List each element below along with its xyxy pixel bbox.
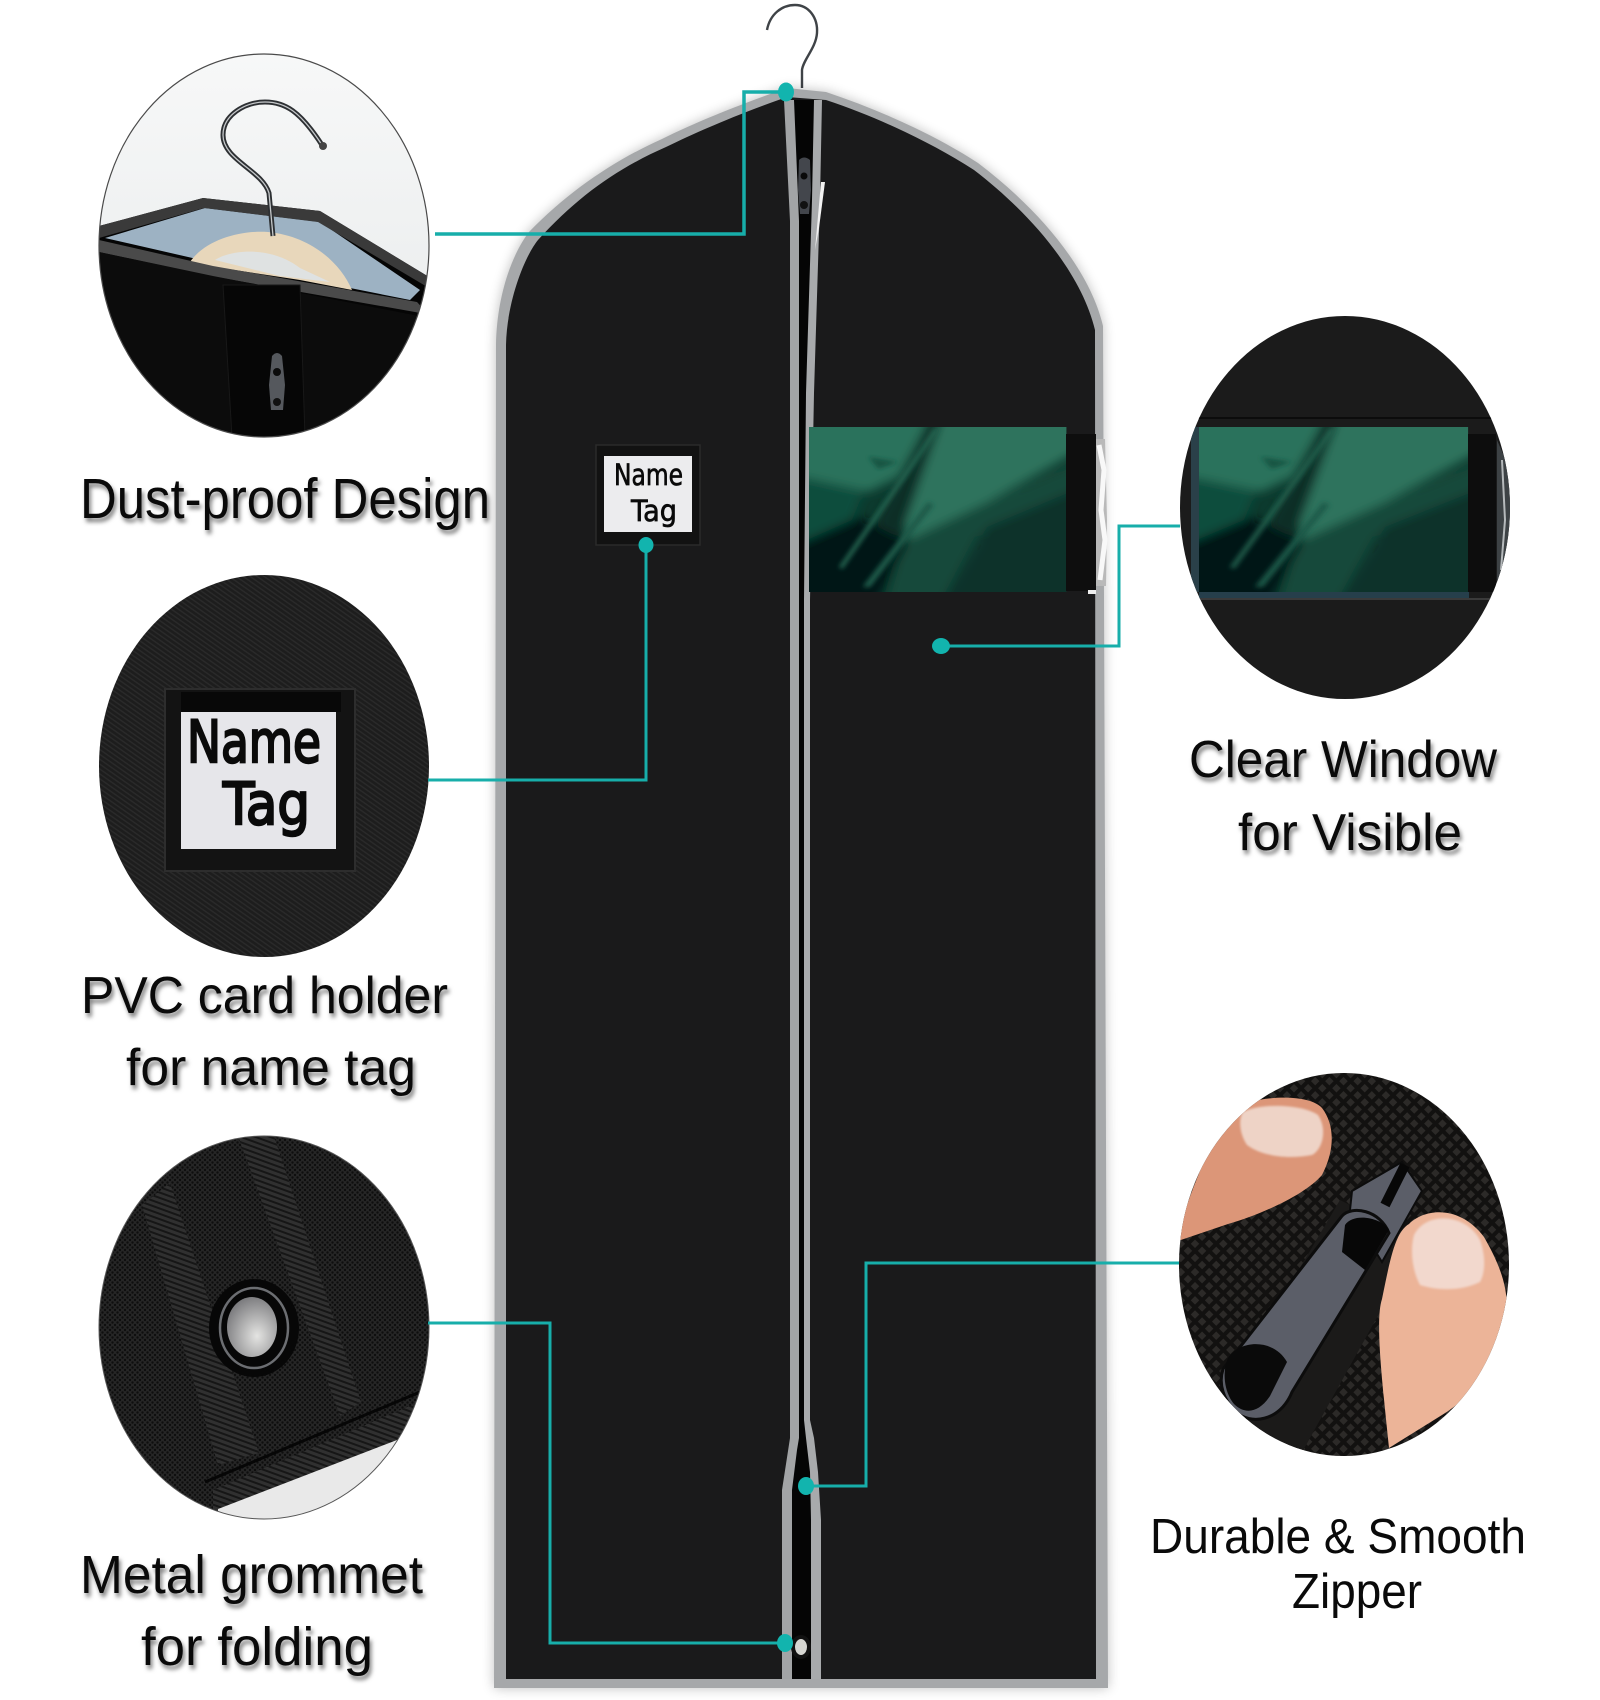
name tag on bag [596, 445, 700, 545]
connector: zipper [798, 1263, 1179, 1495]
right finger [1379, 1212, 1507, 1448]
label: pvc card holder: PVC card holder [81, 967, 448, 1025]
circle: name tag holder: Name [187, 708, 321, 776]
circle: name tag holder: Tag [222, 770, 310, 838]
label: metal grommet: for folding [141, 1617, 373, 1677]
grommet ring [209, 1279, 299, 1377]
label: durable and smooth zipper: Zipper [1292, 1565, 1422, 1619]
circle: zipper [1175, 1073, 1509, 1456]
label: durable and smooth zipper: Durable & Smooth [1150, 1510, 1526, 1564]
garment bag [494, 88, 1108, 1688]
label: pvc card holder: for name tag [126, 1039, 416, 1097]
connector: grommet [428, 1323, 793, 1652]
zipper slider top [798, 158, 811, 214]
label: clear window: for Visible [1238, 804, 1462, 862]
label: durable and smooth zipper [1150, 1510, 1526, 1619]
label: clear window: Clear Window [1189, 731, 1497, 789]
label: metal grommet: Metal grommet [80, 1545, 423, 1605]
left finger [1175, 1098, 1332, 1242]
right zipper trim [804, 100, 822, 1679]
left zipper trim [782, 100, 799, 1679]
name tag on bag: Tag [630, 494, 677, 528]
circle outline: grommet [99, 1136, 429, 1519]
gap highlight [815, 182, 825, 250]
label: dust-proof design: Dust-proof Design [80, 467, 490, 531]
label: metal grommet [80, 1545, 423, 1677]
name tag on bag: Name [614, 458, 683, 492]
circle: clear window [1168, 316, 1510, 699]
circle: dust-proof opening [99, 54, 429, 437]
circle: metal grommet [99, 1136, 429, 1519]
bottom grommet on bag [791, 1635, 811, 1659]
label: clear window [1189, 731, 1497, 862]
zipper pull [1350, 1162, 1422, 1262]
connector: dust-proof [435, 82, 794, 234]
label: pvc card holder [81, 967, 448, 1097]
hanger hook [767, 5, 817, 88]
connector: name tag [428, 537, 654, 780]
connector: window [932, 526, 1180, 654]
circle outline: dust-proof [99, 54, 429, 437]
circle: name tag holder [99, 575, 429, 958]
zipper opening [782, 100, 820, 1679]
clear window on bag [779, 397, 1107, 627]
